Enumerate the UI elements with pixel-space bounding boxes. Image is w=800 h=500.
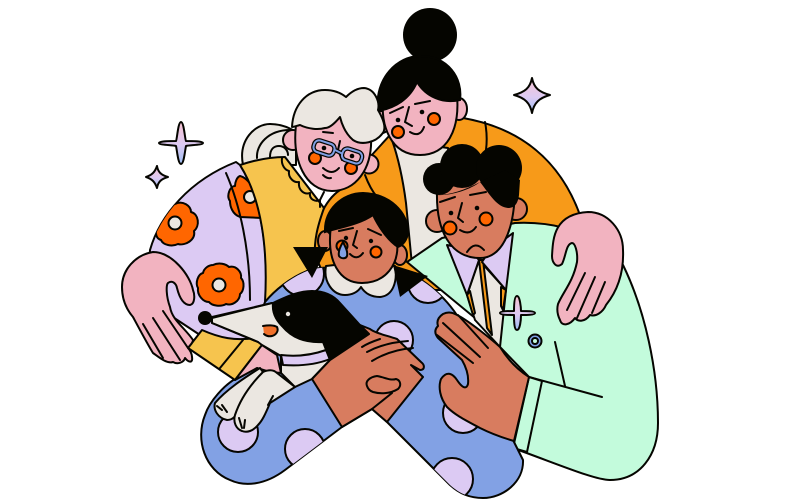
brow, nose, smile [323,132,342,178]
right ear [393,245,407,265]
brows, nose, smile [390,101,430,134]
cheeks [444,212,492,234]
illustration: family hug [121,8,659,499]
left collar [447,245,479,295]
sparkle: upper left small [146,166,168,188]
shirt front [467,260,506,347]
father's hand [435,313,529,441]
face [295,105,371,191]
figure: grandmother [147,88,384,345]
orange jacket [313,118,580,290]
flower 1 [156,203,198,245]
sparkle: upper left large [159,122,203,164]
cheeks [336,240,382,258]
child's crossed hand [312,325,424,427]
yellow vest [240,157,324,302]
eyes [322,146,354,158]
hair [423,144,522,208]
jacket button [528,334,542,348]
hair bun [242,124,296,165]
green jacket [407,223,658,480]
face [330,205,397,283]
cream shirt [392,140,455,265]
grandmother's hand [122,252,194,363]
dog eye [286,312,290,316]
tie stripes [467,260,506,335]
dog body [212,303,340,387]
sleeve seam [226,173,250,300]
sleeve cuff [513,377,542,452]
dog [198,291,368,432]
dog tongue [263,325,278,336]
dog chest pink patch [235,345,281,380]
dog snout lines [212,303,272,342]
hair [325,193,408,247]
tear [339,242,347,258]
face [383,70,457,155]
white collar [325,262,396,297]
right collar [482,233,513,290]
brows, nose, smile [339,228,381,257]
sparkle: upper right [514,78,550,113]
flower 3 [197,264,244,306]
brows, nose, smile, frown [440,192,486,252]
front paw left [215,368,263,420]
figure: mother [313,8,580,290]
polka dots [218,252,483,500]
right ear [505,198,527,220]
face [437,175,515,258]
lilac sleeve [147,162,266,345]
mother's hand on shoulder [552,212,623,324]
grandmother's yellow cuff [188,330,262,380]
eyes [449,206,479,215]
left ear [283,130,303,150]
hair [292,88,384,143]
flower 2 [228,176,262,218]
sleeve flowers [156,176,262,306]
jacket fold [365,122,487,197]
dog nose [198,311,212,325]
hair bun [403,8,457,62]
cheeks [392,113,440,138]
front paw right [234,370,295,432]
glasses [312,139,363,165]
eyes [396,110,424,122]
scalloped collar [282,158,324,207]
hair [378,56,460,111]
black patch [273,291,368,360]
figure: child [201,193,523,500]
right ear [360,154,378,174]
right bow [393,265,428,297]
figure: father upper body [407,144,658,480]
blue dress with long sleeves [201,268,523,498]
left bow [293,247,328,278]
sparkle: on jacket [500,296,535,330]
cheeks [309,152,357,174]
left ear [318,231,332,251]
eyes [344,236,373,243]
left ear [374,111,390,133]
right ear [451,98,467,120]
dog collar [281,350,330,365]
jacket sleeve lines [529,342,602,397]
left ear [426,210,448,232]
